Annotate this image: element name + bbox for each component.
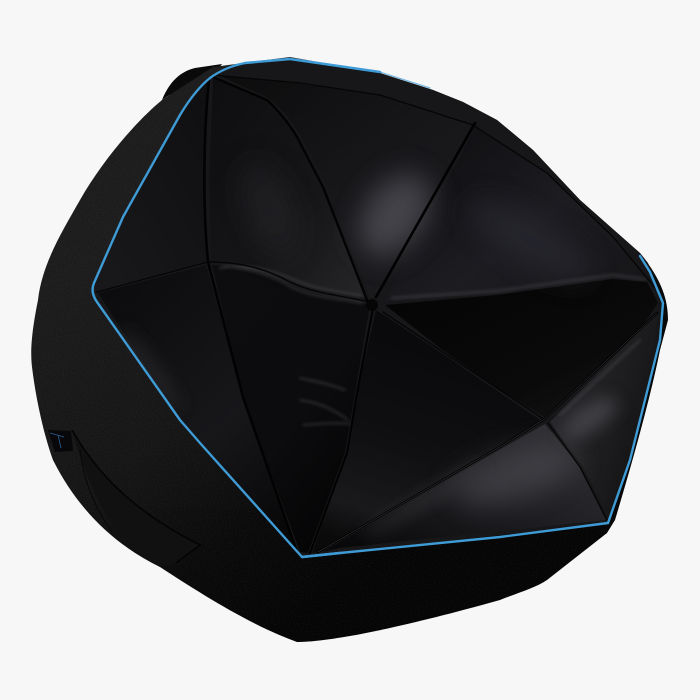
wrinkle highlights	[300, 378, 350, 425]
top carry handle	[162, 64, 222, 100]
panel: right sliver	[550, 348, 624, 472]
seams	[93, 75, 657, 553]
leather seat panels	[94, 60, 662, 556]
side pocket handle	[72, 430, 200, 567]
brand tag	[48, 430, 73, 452]
blue piping	[93, 59, 663, 557]
panel: upper left	[93, 80, 208, 292]
panel: lower centre	[312, 310, 540, 553]
panel: lower left centre	[212, 265, 370, 553]
panel: top centre	[222, 76, 294, 100]
fabric body	[31, 57, 668, 642]
soft leather highlights	[349, 164, 441, 266]
panel: upper right	[385, 127, 655, 301]
panel: right dark	[385, 279, 658, 418]
panel: upper left centre	[209, 77, 367, 298]
product photo: bean bag chair	[31, 57, 668, 642]
panel: lower left	[98, 265, 296, 552]
puffy seam edge highlights	[220, 266, 645, 415]
panel: lower right	[322, 424, 606, 552]
